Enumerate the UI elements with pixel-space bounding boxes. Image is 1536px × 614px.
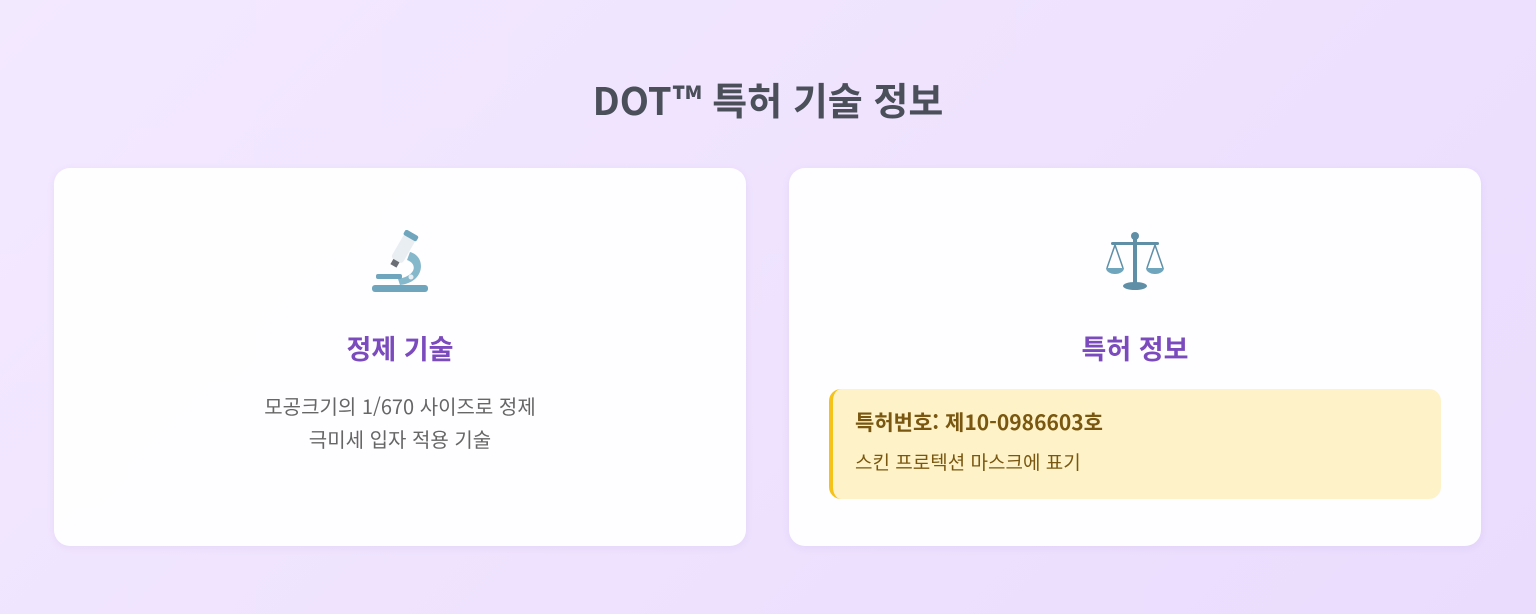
callout: patent number: 스킨 프로텍션 마스크에 표기 xyxy=(855,448,1081,475)
panel: patent info xyxy=(789,168,1481,546)
panel: purification technology xyxy=(54,168,746,546)
description: 모공크기의 1/670 사이즈로 정제 xyxy=(264,391,536,420)
callout: patent number xyxy=(829,389,1441,499)
title: DOT™ 특허 기술 정보 xyxy=(593,71,943,126)
description xyxy=(264,391,536,453)
card title: 특허 정보 xyxy=(1082,328,1188,367)
description: 극미세 입자 적용 기술 xyxy=(309,424,491,453)
callout: patent number: 특허번호: 제10-0986603호 xyxy=(855,407,1103,437)
card title: 정제 기술 xyxy=(347,328,453,367)
icon: microscope xyxy=(372,230,428,292)
icon: scales xyxy=(1106,232,1164,290)
